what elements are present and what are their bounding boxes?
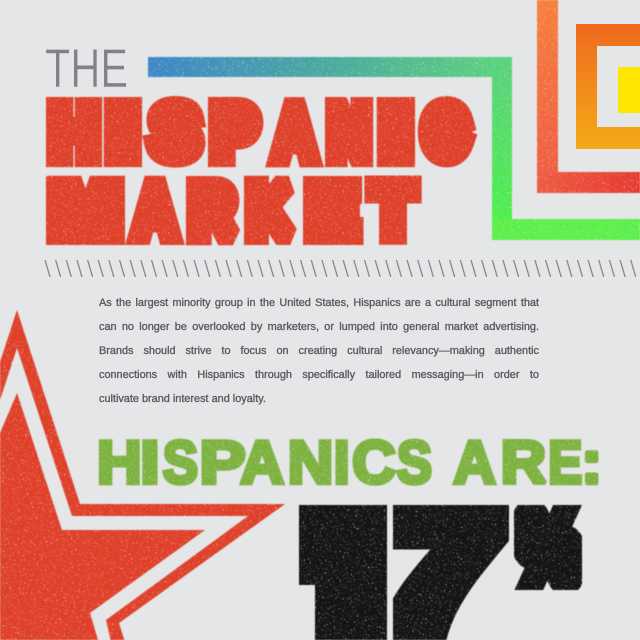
heading: HISPANIC: N xyxy=(329,92,369,173)
star solid centre xyxy=(0,393,205,640)
heading: HISPANIC: I xyxy=(110,92,135,173)
statistic: 17 percent xyxy=(298,504,583,640)
graphic: yellow square xyxy=(618,67,640,113)
graphic: orange square frame xyxy=(576,24,640,149)
heading: Hispanics are: P xyxy=(200,428,246,496)
heading: Hispanics are: H xyxy=(97,429,142,496)
text block: intro paragraph: cultivate brand interest and loyalty. xyxy=(99,393,266,405)
heading: Hispanics are: E xyxy=(548,429,582,496)
heading: Hispanics are: I xyxy=(334,430,350,496)
heading: MARKET: E xyxy=(308,171,356,251)
heading: Hispanics are: I xyxy=(140,429,160,496)
graphic: red-orange stripe xyxy=(537,0,640,193)
heading: MARKET: T xyxy=(373,171,413,251)
heading: Hispanics are: R xyxy=(501,429,546,497)
heading: Hispanics are: A xyxy=(240,429,284,496)
text block: intro paragraph: can no longer be overlooked by marketers, or lumped into general market advertising. xyxy=(99,321,539,333)
title xyxy=(45,37,465,251)
heading: MARKET: A xyxy=(135,170,175,251)
heading: THE: THE xyxy=(45,37,128,99)
text block: intro paragraph: As the largest minority group in the United States, Hispanics are a cultural segment that xyxy=(99,297,539,309)
heading: HISPANIC: S xyxy=(152,93,199,173)
heading: HISPANIC: C xyxy=(426,95,465,168)
graphic: blue to green stripe xyxy=(148,57,640,240)
heading: Hispanics are: N xyxy=(288,429,333,497)
text block: intro paragraph: connections with Hispanics through specifically tailored messaging—in order to xyxy=(99,369,539,381)
heading: Hispanics are: S xyxy=(163,429,198,496)
heading: MARKET: M xyxy=(52,171,119,251)
percent sign: % xyxy=(517,492,580,603)
star outline band xyxy=(0,310,285,640)
text block: intro paragraph xyxy=(99,297,539,405)
heading: Hispanics are xyxy=(97,428,602,497)
heading: HISPANIC: I xyxy=(383,92,408,173)
heading: MARKET: K xyxy=(248,171,291,250)
heading: Hispanics are: : xyxy=(581,429,602,496)
heading: HISPANIC xyxy=(51,92,465,173)
heading: Hispanics are: C xyxy=(352,429,396,496)
heading: MARKET: R xyxy=(190,171,234,251)
heading: HISPANIC: H xyxy=(51,92,97,173)
heading: MARKET xyxy=(52,170,413,251)
heading: HISPANIC: P xyxy=(213,92,257,173)
heading: Hispanics are: A xyxy=(454,428,496,496)
text block: intro paragraph: Brands should strive to focus on creating cultural relevancy—making authentic xyxy=(99,345,539,357)
icon: red star xyxy=(0,310,285,640)
heading: Hispanics are: S xyxy=(397,429,432,496)
heading: HISPANIC: A xyxy=(275,92,314,173)
